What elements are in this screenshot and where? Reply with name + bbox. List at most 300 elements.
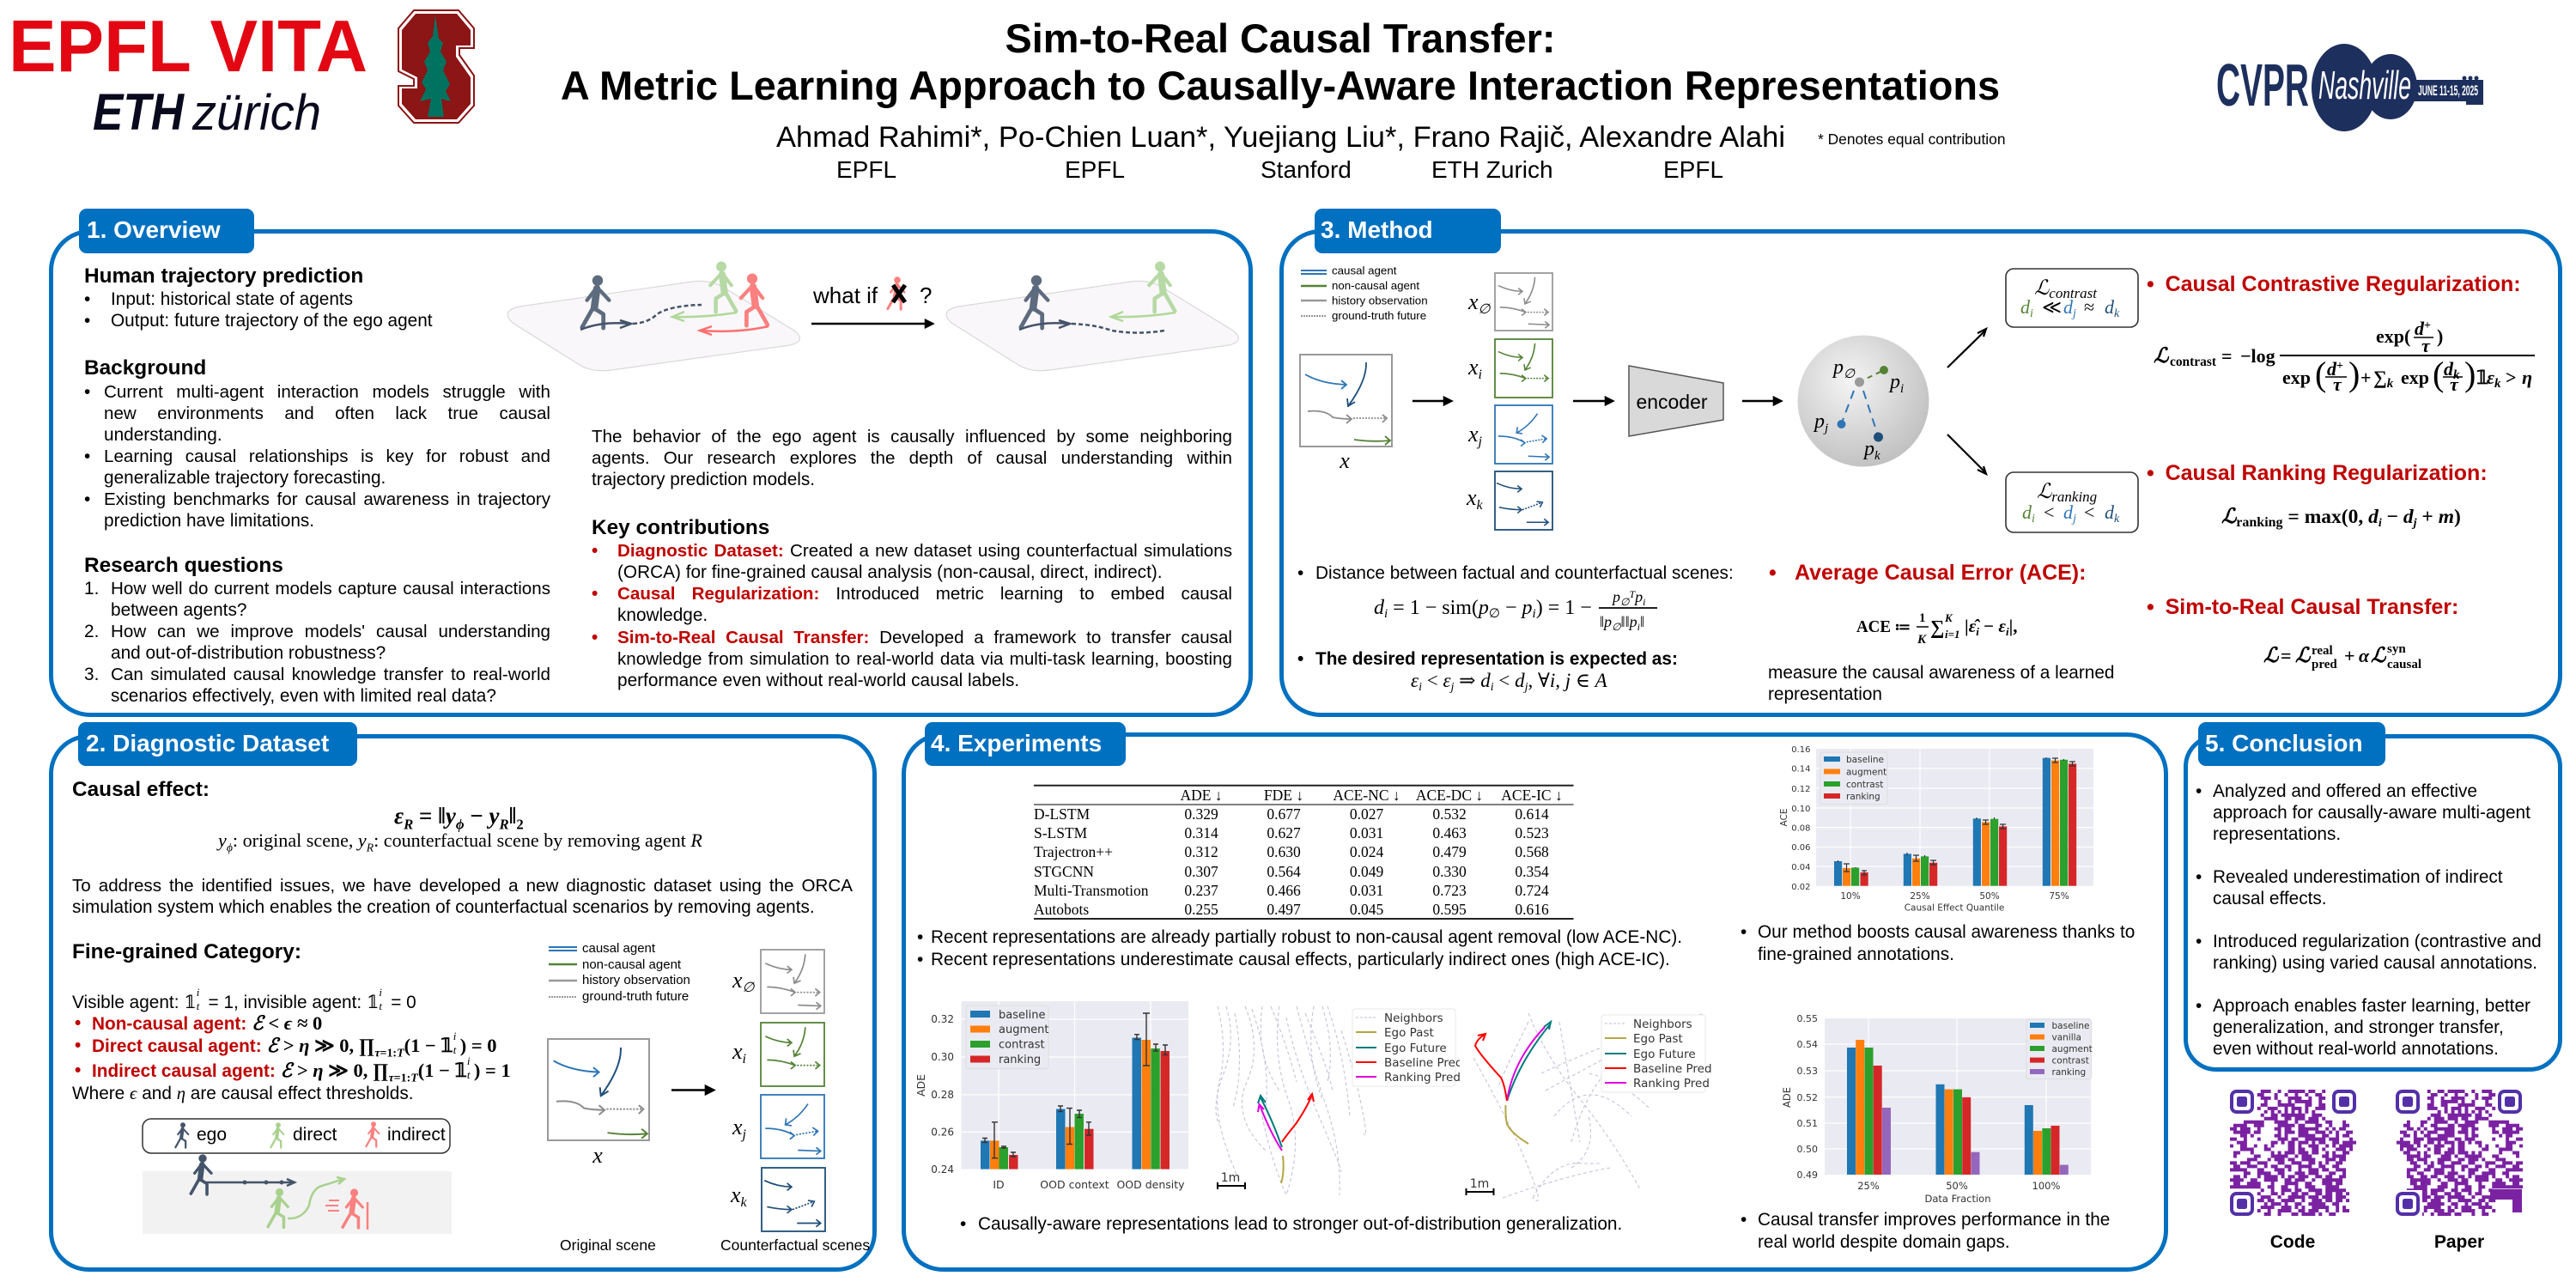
formula: ranking loss xyxy=(2221,506,2461,530)
affiliations: EPFL xyxy=(1663,156,1723,183)
box: ranking loss: ranking xyxy=(2051,489,2097,505)
formula: contrastive loss: ) xyxy=(2464,355,2476,393)
box: contrastive loss: d xyxy=(2020,296,2030,318)
formula: contrastive loss: ) xyxy=(2437,325,2443,347)
formula: expected ordering: < xyxy=(1494,670,1515,691)
formula: causal effect: εR = ‖yϕ − yR‖2 xyxy=(394,803,524,832)
illustration: what-if counterfactual scene: ? xyxy=(920,283,932,308)
bar chart: ADE by data fraction: vanilla xyxy=(2052,1032,2081,1042)
heading: causal contrastive regularization: • xyxy=(2147,272,2154,296)
panel: 5. Conclusion xyxy=(2184,722,2562,1072)
table: model results: 0.045 xyxy=(1350,901,1383,918)
formula: ranking loss: ℒ xyxy=(2221,506,2238,528)
formula: total loss: ℒ xyxy=(2371,645,2387,667)
table: model results: 0.329 xyxy=(1184,805,1218,823)
text: real world transfer finding: Causal transfer improves performance in the xyxy=(1758,1210,2110,1230)
text: research questions list: 1. xyxy=(84,579,99,598)
text: dataset description xyxy=(72,876,853,917)
formula: contrastive loss: ( xyxy=(2433,355,2444,393)
formula: expected ordering: d xyxy=(1515,670,1525,691)
heading: sim-to-real causal transfer: • xyxy=(2147,595,2154,619)
table: model results: 0.479 xyxy=(1432,843,1467,860)
formula: ACE: ≔ xyxy=(1894,618,1911,635)
table: model results: 0.330 xyxy=(1432,863,1467,880)
table: model results: 0.255 xyxy=(1184,901,1218,918)
formula: distance: ‖p xyxy=(1600,613,1612,630)
plot: trajectory example two: Baseline Pred xyxy=(1633,1062,1712,1076)
bar chart: ADE by scenario: ID xyxy=(993,1178,1005,1191)
text: background bullets: new environments and often lack true causal xyxy=(104,404,550,423)
formula: ACE xyxy=(1856,611,2017,647)
table: model results: 0.463 xyxy=(1432,824,1467,841)
panel: 3. Method: Average Causal Error (ACE): xyxy=(1795,561,2086,585)
affiliations: Stanford xyxy=(1261,156,1352,183)
formula: total loss: syn xyxy=(2387,642,2406,656)
diagram: original and counterfactual scenes: ∅ xyxy=(743,981,756,995)
box: ranking loss xyxy=(2005,471,2139,533)
text: agent category definitions: i xyxy=(379,986,382,999)
text: measure causal awareness: measure the causal awareness of a learned xyxy=(1768,663,2114,683)
bar chart: ACE by causal effect quantile: Causal Effect Quantile xyxy=(1905,903,2004,914)
formula: contrastive loss: ) xyxy=(2348,355,2360,393)
text: key contributions list: Sim-to-Real Causal Transfer: Developed a framework to transfer causal xyxy=(617,628,1232,647)
plot: trajectory example two: Ego Past xyxy=(1633,1032,1683,1046)
table: model results: 0.497 xyxy=(1267,901,1301,918)
table: model results: D-LSTM xyxy=(1034,805,1091,823)
table: model results: 0.027 xyxy=(1350,805,1383,823)
plot: trajectory example one: Ego Past xyxy=(1384,1026,1434,1040)
heading: 3. Method: 3. Method xyxy=(1321,216,1433,243)
text: conclusion bullets: approach for causally-aware multi-agent xyxy=(2213,803,2530,823)
text: background bullets xyxy=(84,382,550,531)
logo: CVPR Nashville guitar: CVPR xyxy=(2216,52,2309,118)
formula: ACE: i xyxy=(1976,625,1979,638)
diagram: causal scenes, encoder and latent space: x xyxy=(1468,355,1479,380)
box: contrastive loss: contrast xyxy=(2049,285,2098,301)
text: desired representation: • xyxy=(1297,649,1303,669)
formula: total loss: pred xyxy=(2312,658,2337,671)
text: table findings: • xyxy=(917,950,923,969)
box: contrastive loss: d xyxy=(2105,296,2114,318)
bar chart: ADE by data fraction: 0.52 xyxy=(1796,1092,1818,1103)
bar chart: ACE by causal effect quantile: baseline xyxy=(1846,755,1884,765)
bar chart: ADE by data fraction: 50% xyxy=(1946,1180,1968,1192)
text: conclusion bullets: • xyxy=(2196,781,2202,801)
diagram: causal scenes, encoder and latent space: i xyxy=(1479,368,1482,382)
text: research questions list: Can simulated causal knowledge transfer to real-world xyxy=(111,665,550,684)
plot: trajectory example one xyxy=(1211,1000,1460,1200)
diagram: original and counterfactual scenes: x xyxy=(732,968,743,993)
table: model results xyxy=(1030,781,1577,922)
legend: agent types: history observation xyxy=(582,973,690,987)
formula: distance: i xyxy=(1637,621,1640,633)
panel: 2. Diagnostic Dataset xyxy=(49,722,877,1272)
text: key contributions list: Diagnostic Dataset: Created a new dataset using counterfactual simulations xyxy=(617,541,1232,561)
affiliations xyxy=(836,156,1723,183)
text: dataset description: simulation system which enables the creation of counterfactual scenarios by removing agents. xyxy=(72,897,815,917)
legend: agent types: non-causal agent xyxy=(582,957,682,972)
formula: contrastive loss: −log xyxy=(2240,345,2275,367)
formula: distance: ‖ xyxy=(1640,613,1644,630)
formula: contrastive loss: = xyxy=(2221,345,2233,367)
text: key contributions list: (ORCA) for fine-grained causal analysis (non-causal, direct, indirect). xyxy=(617,562,1163,582)
legend: agent types xyxy=(1301,264,1428,322)
bar chart: ACE by causal effect quantile: 0.12 xyxy=(1791,785,1810,794)
text: conclusion bullets: Approach enables faster learning, better xyxy=(2213,996,2530,1016)
formula: ACE: K xyxy=(1944,611,1953,624)
text: agent category definitions: Non-causal agent: ℰ < ϵ ≈ 0 xyxy=(92,1012,322,1034)
heading: background: Background xyxy=(84,356,206,380)
formula: expected ordering: i, j ∈ A xyxy=(1550,670,1607,691)
text: agent category definitions: i xyxy=(453,1030,456,1042)
bar chart: ACE by causal effect quantile: 0.14 xyxy=(1791,764,1810,775)
table: model results: 0.024 xyxy=(1350,843,1383,860)
formula: total loss xyxy=(2263,642,2421,671)
diagram: causal scenes, encoder and latent space: x xyxy=(1339,448,1350,473)
bar chart: ACE by causal effect quantile: contrast xyxy=(1846,780,1883,790)
text: agent category definitions: t xyxy=(467,1068,471,1081)
bar chart: ADE by data fraction: 100% xyxy=(2032,1180,2061,1192)
text: conclusion bullets: • xyxy=(2196,996,2202,1016)
formula: distance: p xyxy=(1613,588,1620,605)
formula: ACE: |ε̂ xyxy=(1965,616,1976,636)
bar chart: ADE by data fraction: ADE xyxy=(1781,1087,1793,1108)
heading: 4. Experiments xyxy=(925,722,1126,766)
bar chart: ACE by causal effect quantile: 75% xyxy=(2049,891,2069,902)
bar chart: ACE by causal effect quantile: augment xyxy=(1846,768,1886,778)
diagram: original and counterfactual scenes: i xyxy=(743,1052,746,1066)
text: conclusion bullets: ranking) using varied causal annotations. xyxy=(2213,953,2537,973)
text: research questions list xyxy=(84,579,550,706)
formula: distance: p xyxy=(1521,597,1533,619)
box: ranking loss: i xyxy=(2032,513,2035,526)
text: key contributions list: knowledge from simulation to real-world data via multi-task learning, boosting xyxy=(617,649,1232,669)
table: model results: Multi-Transmotion xyxy=(1034,882,1149,899)
bar chart: ADE by scenario: OOD density xyxy=(1116,1178,1185,1191)
diagram: causal scenes, encoder and latent space: p xyxy=(1890,371,1900,393)
bar chart: ADE by scenario: augment xyxy=(999,1024,1048,1036)
box: ranking loss: < xyxy=(2044,501,2054,523)
diagram: causal scenes, encoder and latent space: ∅ xyxy=(1479,302,1492,317)
formula: total loss: ℒ xyxy=(2295,645,2312,667)
legend: agent types: causal agent xyxy=(1332,264,1397,276)
formula: contrastive loss: + xyxy=(2336,360,2343,373)
table: model results: ADE ↓ xyxy=(1180,787,1223,804)
formula: distance: p xyxy=(1633,588,1643,605)
formula: contrastive loss: ε xyxy=(2487,367,2494,388)
text: agent category definitions: Indirect causal agent: ℰ > η ≫ 0, ∏τ=1:T(1 − 𝟙 ) = 1 xyxy=(92,1060,511,1085)
table: model results: 0.523 xyxy=(1515,824,1549,841)
table: model results: 0.630 xyxy=(1267,843,1301,860)
text: real world transfer finding xyxy=(1741,1209,2118,1253)
bar chart: ADE by data fraction: augment xyxy=(2052,1044,2093,1054)
bar chart: ADE by scenario: OOD context xyxy=(1040,1178,1109,1191)
formula: ranking loss: − xyxy=(2382,506,2403,528)
formula: distance: ∅ xyxy=(1489,607,1500,621)
box: ranking loss: k xyxy=(2114,513,2120,526)
heading: 5. Conclusion xyxy=(2198,722,2385,766)
text: ego agent behaviour paragraph xyxy=(592,427,1232,489)
box: ranking loss: d xyxy=(2105,501,2114,523)
bar chart: ACE by causal effect quantile: 0.04 xyxy=(1791,863,1810,872)
plot: trajectory example two: Ego Future xyxy=(1633,1048,1696,1061)
formula: total loss: + xyxy=(2344,645,2355,666)
text: real world transfer finding: • xyxy=(1741,1210,1747,1230)
text: conclusion bullets xyxy=(2196,781,2539,1060)
box: ranking loss: d xyxy=(2063,501,2073,523)
legend: agent types: causal agent xyxy=(582,941,656,956)
box: contrastive loss: d xyxy=(2063,296,2073,318)
formula: total loss: causal xyxy=(2387,658,2421,671)
text: conclusion bullets: • xyxy=(2196,932,2202,951)
formula: contrastive loss: τ xyxy=(2450,374,2459,395)
table: model results: 0.354 xyxy=(1515,863,1549,880)
table: model results: 0.724 xyxy=(1515,882,1549,899)
bar chart: ADE by data fraction xyxy=(1777,1012,2099,1205)
text: conclusion bullets: Analyzed and offered an effective xyxy=(2213,781,2477,801)
panel: 4. Experiments xyxy=(902,722,2168,1272)
table: model results: 0.614 xyxy=(1515,805,1549,823)
text: key contributions list: • xyxy=(592,584,598,604)
bar chart: ADE by data fraction: 0.53 xyxy=(1796,1066,1818,1077)
plot: trajectory example one: 1m xyxy=(1221,1171,1240,1185)
QR code: paper xyxy=(2396,1090,2523,1217)
heading: 2. Diagnostic Dataset xyxy=(78,722,357,766)
formula: expected ordering: j xyxy=(1523,681,1528,694)
text: agent category definitions xyxy=(72,986,511,1103)
bar chart: ADE by scenario xyxy=(910,996,1194,1194)
table: model results: 0.532 xyxy=(1432,805,1467,823)
text: conclusion bullets: even without real-world annotations. xyxy=(2213,1039,2499,1059)
bar chart: ADE by data fraction: ranking xyxy=(2052,1067,2086,1078)
text: ego agent behaviour paragraph: The behavior of the ego agent is causally influenced by some neighboring xyxy=(592,427,1232,447)
text: dataset description: To address the identified issues, we have developed a new diagnostic dataset using the ORCA xyxy=(72,876,853,896)
formula: expected ordering: ε xyxy=(1443,670,1451,691)
formula: contrastive loss: > xyxy=(2506,367,2517,388)
table: model results: 0.595 xyxy=(1432,901,1467,918)
bar chart: ADE by data fraction: 0.51 xyxy=(1796,1118,1818,1129)
title: A Metric Learning Approach to Causally-Aware Interaction Representations xyxy=(561,64,2000,108)
text: key contributions list xyxy=(592,541,1232,690)
affiliations: ETH Zurich xyxy=(1431,156,1553,183)
diagram: causal scenes, encoder and latent space: encoder xyxy=(1636,391,1708,413)
text: agent category definitions: Direct causal agent: ℰ > η ≫ 0, ∏τ=1:T(1 − 𝟙 ) = 0 xyxy=(92,1035,497,1060)
formula caption: yϕ: original scene, yR: counterfactual scene by removing agent R xyxy=(218,829,702,854)
formula: distance: i xyxy=(1643,596,1645,608)
table: model results: 0.564 xyxy=(1267,863,1301,880)
heading: key contributions: Key contributions xyxy=(592,516,769,539)
table: model results: 0.677 xyxy=(1267,805,1301,823)
heading: 1. Overview xyxy=(79,209,254,253)
caption: original scene: Original scene xyxy=(560,1236,656,1254)
formula: contrastive loss: exp xyxy=(2282,367,2311,388)
text: inputs and outputs: Output: future trajectory of the ego agent xyxy=(111,311,433,331)
diagram: original and counterfactual scenes: x xyxy=(592,1143,603,1168)
formula: total loss: = xyxy=(2281,645,2292,666)
heading: research questions: Research questions xyxy=(84,554,283,577)
authors: Ahmad Rahimi*, Po-Chien Luan*, Yuejiang Liu*, Frano Rajič, Alexandre Alahi xyxy=(776,121,1785,154)
table: model results: Trajectron++ xyxy=(1034,843,1113,860)
formula: distance: ‖‖p xyxy=(1621,613,1637,630)
formula: contrastive loss: + xyxy=(2424,319,2431,332)
bar chart: ADE by scenario: ADE xyxy=(914,1074,927,1097)
formula: contrastive loss: contrast xyxy=(2170,355,2217,369)
heading: sim-to-real causal transfer xyxy=(2147,595,2458,619)
formula: ranking loss: ranking xyxy=(2236,515,2283,530)
label: code: Code xyxy=(2270,1232,2315,1252)
text: agent category definitions: t xyxy=(379,999,382,1012)
formula: contrastive loss: ( xyxy=(2315,355,2326,393)
table: model results: 0.616 xyxy=(1515,901,1549,918)
bar chart: ADE by data fraction: Data Fraction xyxy=(1924,1193,1991,1205)
formula: ranking loss: d xyxy=(2403,506,2415,528)
box: contrastive loss: ≈ xyxy=(2084,296,2094,318)
table: model results: 0.312 xyxy=(1184,843,1218,860)
legend: agent types: ground-truth future xyxy=(582,989,689,1004)
plot: trajectory example one: Neighbors xyxy=(1384,1012,1443,1025)
bar chart: ADE by data fraction: contrast xyxy=(2052,1056,2089,1066)
text: conclusion bullets: Revealed underestimation of indirect xyxy=(2213,867,2503,887)
formula: contrastive loss: k xyxy=(2387,377,2394,391)
formula: ranking loss: = max(0, xyxy=(2283,506,2368,528)
diagram: causal scenes, encoder and latent space: x xyxy=(1468,289,1479,314)
text: agent category definitions: i xyxy=(467,1054,471,1067)
bar chart: ADE by scenario: 0.26 xyxy=(931,1127,954,1139)
diagram: original and counterfactual scenes: x xyxy=(732,1115,743,1139)
bar chart: ADE by scenario: contrast xyxy=(999,1039,1045,1051)
bar chart: ACE by causal effect quantile: ACE xyxy=(1779,809,1789,826)
table: model results: 0.031 xyxy=(1350,882,1383,899)
formula: ranking loss: + xyxy=(2417,506,2439,528)
bar chart: ACE by causal effect quantile: 0.06 xyxy=(1791,843,1810,853)
table: model results: 0.568 xyxy=(1515,843,1549,860)
logo: CVPR Nashville guitar xyxy=(2216,44,2483,131)
table: model results: 0.466 xyxy=(1267,882,1301,899)
bar chart: ACE by causal effect quantile: 0.16 xyxy=(1791,745,1810,755)
diagram: causal scenes, encoder and latent space: p xyxy=(1814,410,1825,433)
heading: 5. Conclusion: 5. Conclusion xyxy=(2205,730,2363,756)
text: inputs and outputs: • xyxy=(84,289,90,309)
formula: contrastive loss xyxy=(2154,318,2535,395)
bar chart: ACE by causal effect quantile: 0.02 xyxy=(1791,883,1810,892)
formula: contrastive loss: k xyxy=(2453,368,2460,382)
panel: 3. Method xyxy=(1279,209,2562,717)
logo: CVPR Nashville guitar: Nashville xyxy=(2318,63,2411,107)
formula: contrastive loss: η xyxy=(2522,367,2532,388)
bar chart: ADE by data fraction: 0.54 xyxy=(1796,1039,1818,1050)
formula: ranking loss: m) xyxy=(2439,506,2461,528)
table: model results: 0.237 xyxy=(1184,882,1218,899)
text: inputs and outputs xyxy=(84,289,433,331)
formula: contrastive loss: + xyxy=(2360,367,2372,388)
formula: ranking loss: d xyxy=(2368,506,2379,528)
formula: contrastive loss: exp xyxy=(2401,367,2429,388)
box: contrastive loss: i xyxy=(2030,307,2033,320)
text: causal awareness finding: fine-grained annotations. xyxy=(1758,945,1954,964)
heading: 4. Experiments: 4. Experiments xyxy=(931,730,1102,756)
text: key contributions list: Causal Regularization: Introduced metric learning to embed causal xyxy=(617,584,1232,604)
text: background bullets: understanding. xyxy=(104,425,222,445)
bar chart: ADE by data fraction: 0.49 xyxy=(1796,1170,1818,1181)
illustration: indirect causal chain xyxy=(143,1154,452,1234)
text: research questions list: between agents? xyxy=(111,600,246,620)
QR code: code xyxy=(2230,1090,2356,1217)
box: ranking loss: ℒ xyxy=(2037,481,2051,503)
text: table findings: • xyxy=(917,927,923,947)
text: background bullets: prediction have limitations. xyxy=(104,511,314,531)
text: agent category definitions: t xyxy=(453,1043,456,1056)
bar chart: ACE by causal effect quantile: 0.08 xyxy=(1791,824,1810,833)
formula: expected ordering: d xyxy=(1480,670,1491,691)
bar chart: ACE by causal effect quantile: 50% xyxy=(1979,891,2000,902)
box: contrastive loss: ℒ xyxy=(2034,277,2049,300)
diagram: causal scenes, encoder and latent space: j xyxy=(1477,434,1483,449)
plot: trajectory example one: Ego Future xyxy=(1384,1042,1447,1055)
bar chart: ADE by scenario: 0.32 xyxy=(931,1013,954,1025)
heading: average causal error xyxy=(1769,561,2086,585)
formula: ACE: − xyxy=(1979,616,1998,636)
table: model results: 0.723 xyxy=(1432,882,1467,899)
bar chart: ACE by causal effect quantile: ranking xyxy=(1846,792,1880,802)
text: research questions list: scenarios effectively, even with limited real data? xyxy=(111,686,496,706)
bar chart: ADE by scenario: 0.24 xyxy=(931,1163,954,1176)
text: agent category definitions: t xyxy=(197,999,199,1012)
table: model results: 0.031 xyxy=(1350,824,1383,841)
formula: contrastive loss: 𝟙 xyxy=(2476,367,2488,388)
text: table findings xyxy=(917,927,1690,970)
diagram: causal scenes, encoder and latent space xyxy=(1299,272,1988,531)
diagram: causal scenes, encoder and latent space: i xyxy=(1900,382,1904,396)
text: background bullets: generalizable trajectory forecasting. xyxy=(104,468,386,488)
formula: ACE: K xyxy=(1917,633,1927,647)
plot: trajectory example two: 1m xyxy=(1470,1177,1489,1191)
text: conclusion bullets: Introduced regularization (contrastive and xyxy=(2213,932,2542,951)
formula: contrastive loss: d xyxy=(2327,358,2336,380)
bar chart: ADE by scenario: ranking xyxy=(999,1054,1041,1066)
box: ranking loss: < xyxy=(2084,501,2094,523)
bar chart: ACE by causal effect quantile: 10% xyxy=(1840,891,1861,902)
bar chart: ADE by scenario: baseline xyxy=(999,1009,1045,1022)
formula: contrastive loss: ∑ xyxy=(2373,367,2387,388)
diagram: causal scenes, encoder and latent space: x xyxy=(1467,485,1477,510)
box: contrastive loss: j xyxy=(2071,307,2076,320)
diagram: causal scenes, encoder and latent space: p xyxy=(1833,356,1844,379)
panel: 3. Method: Sim-to-Real Causal Transfer: xyxy=(2166,595,2458,619)
formula: distance: ) = 1 − xyxy=(1536,597,1592,619)
formula: distance: − xyxy=(1500,597,1522,619)
diagram: original and counterfactual scenes: x xyxy=(732,1039,743,1064)
table: model results: 0.049 xyxy=(1350,863,1383,880)
text: background bullets: Current multi-agent interaction models struggle with xyxy=(104,382,550,402)
legend: agent types: history observation xyxy=(1332,294,1428,307)
table: model results: 0.627 xyxy=(1267,824,1301,841)
table: model results: 0.314 xyxy=(1184,824,1218,841)
diagram: causal scenes, encoder and latent space: j xyxy=(1823,422,1828,435)
formula: contrastive loss: τ xyxy=(2421,335,2431,356)
text: causal awareness finding: • xyxy=(1741,922,1747,942)
legend: ego, direct, indirect: indirect xyxy=(387,1125,446,1145)
text: agent category definitions: • xyxy=(75,1036,81,1055)
text: real world transfer finding: real world despite domain gaps. xyxy=(1758,1232,2010,1252)
text: key contributions list: • xyxy=(592,541,598,561)
table: model results: FDE ↓ xyxy=(1264,787,1303,804)
plot: trajectory example one: Ranking Pred xyxy=(1384,1071,1460,1084)
text: conclusion bullets: causal effects. xyxy=(2213,889,2327,908)
text: distance between factual and counterfactual scenes: Distance between factual and counterfactual scenes: xyxy=(1315,563,1734,583)
bar chart: ACE by causal effect quantile: 25% xyxy=(1910,891,1930,902)
diagram: original and counterfactual scenes: x xyxy=(731,1182,741,1207)
text: agent category definitions: Visible agent: 𝟙 = 1, invisible agent: 𝟙 = 0 xyxy=(72,993,416,1012)
